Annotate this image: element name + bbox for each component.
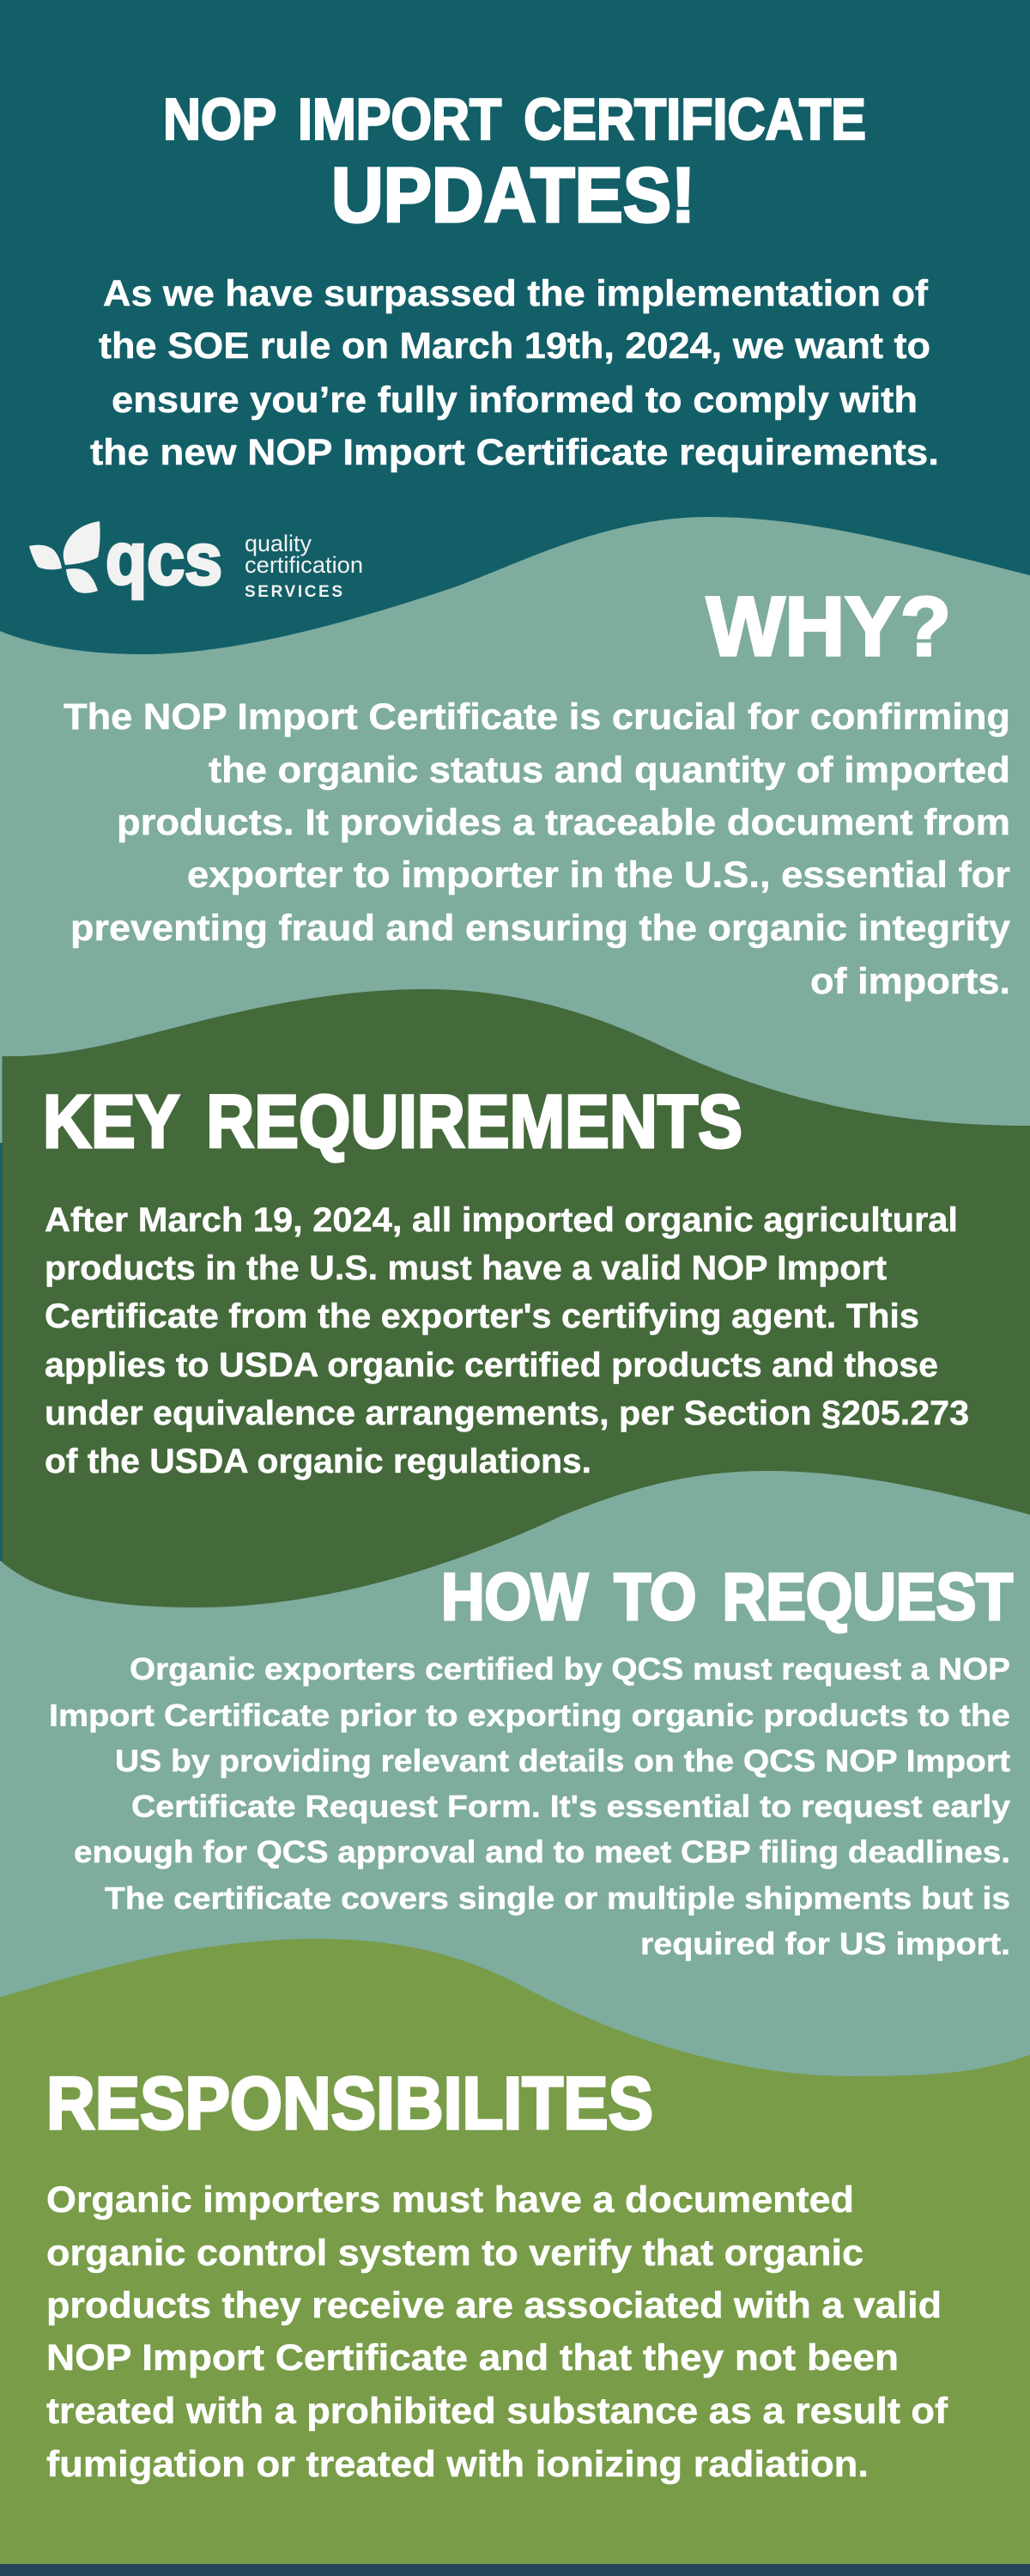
title: NOP IMPORT CERTIFICATE <box>163 87 866 152</box>
text block: why: the organic status and quantity of imported <box>209 750 1010 791</box>
text block: responsibilities: treated with a prohibited substance as a result of <box>46 2391 948 2432</box>
text block: how to request: Import Certificate prior to exporting organic products to the <box>49 1698 1010 1733</box>
text block: why: products. It provides a traceable document from <box>117 802 1010 843</box>
heading: key requirements: KEY REQUIREMENTS <box>43 1080 742 1163</box>
text block: how to request: Organic exporters certified by QCS must request a NOP <box>130 1651 1010 1686</box>
text block: why <box>64 696 1010 1002</box>
logo: qcs quality certification services: quality <box>245 531 312 556</box>
text block: why: of imports. <box>810 961 1010 1002</box>
panel: responsibilities background wave <box>0 1939 1030 2564</box>
heading: why: WHY? <box>706 580 951 673</box>
intro text: the new NOP Import Certificate requirements. <box>90 432 939 473</box>
text block: responsibilities: NOP Import Certificate and that they not been <box>46 2337 899 2379</box>
text block: key requirements: Certificate from the exporter's certifying agent. This <box>45 1297 919 1335</box>
text block: how to request <box>49 1651 1010 1961</box>
intro text: As we have surpassed the implementation of <box>103 273 929 314</box>
logo: qcs quality certification services: SERVICES <box>245 583 342 601</box>
heading: responsibilities: RESPONSIBILITES <box>46 2063 653 2145</box>
panel: left edge sliver <box>0 1056 2 1561</box>
text block: responsibilities <box>46 2179 948 2485</box>
icon: three leaves <box>29 521 100 593</box>
title: UPDATES! <box>331 153 695 239</box>
text block: key requirements: under equivalence arrangements, per Section §205.273 <box>45 1394 969 1432</box>
text block: how to request: required for US import. <box>640 1926 1010 1961</box>
text block: responsibilities: fumigation or treated with ionizing radiation. <box>46 2444 869 2485</box>
text block: how to request: The certificate covers single or multiple shipments but is <box>105 1880 1010 1916</box>
text block: responsibilities: organic control system to verify that organic <box>46 2233 863 2274</box>
intro text <box>90 273 939 473</box>
text block: key requirements: After March 19, 2024, all imported organic agricultural <box>45 1201 958 1239</box>
text block: key requirements: of the USDA organic regulations. <box>45 1443 591 1480</box>
logo: qcs quality certification services <box>29 519 363 601</box>
text block: why: The NOP Import Certificate is crucial for confirming <box>64 696 1010 738</box>
text block: how to request: Certificate Request Form. It's essential to request early <box>131 1789 1010 1824</box>
text block: responsibilities: Organic importers must have a documented <box>46 2179 854 2221</box>
logo: qcs quality certification services: qcs <box>106 519 222 600</box>
title <box>163 87 866 239</box>
text block: key requirements: applies to USDA organic certified products and those <box>45 1346 938 1384</box>
text block: how to request: US by providing relevant details on the QCS NOP Import <box>115 1743 1010 1778</box>
text block: key requirements <box>45 1201 969 1480</box>
text block: how to request: enough for QCS approval and to meet CBP filing deadlines. <box>74 1834 1010 1869</box>
text block: why: exporter to importer in the U.S., essential for <box>187 854 1010 896</box>
text block: key requirements: products in the U.S. must have a valid NOP Import <box>45 1249 887 1287</box>
footer band <box>0 2564 1030 2576</box>
intro text: ensure you’re fully informed to comply with <box>112 380 918 421</box>
text block: responsibilities: products they receive are associated with a valid <box>46 2285 942 2326</box>
logo: qcs quality certification services: certification <box>245 552 363 578</box>
panel: why and how-to background wave <box>0 517 1030 2576</box>
intro text: the SOE rule on March 19th, 2024, we want to <box>99 325 930 367</box>
panel: key requirements background wave <box>2 989 1030 1607</box>
text block: why: preventing fraud and ensuring the organic integrity <box>70 908 1010 949</box>
